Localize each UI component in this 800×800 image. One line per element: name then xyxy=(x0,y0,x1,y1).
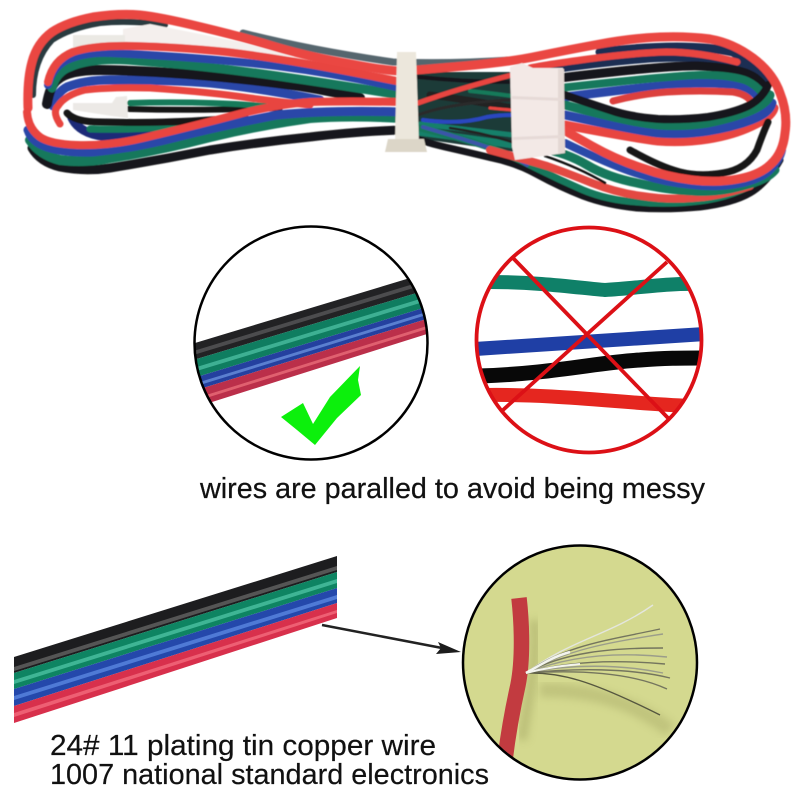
right middle ribbon xyxy=(565,85,774,142)
photo: full RGB cable bundle with connectors xyxy=(27,14,786,209)
caption: wire specification: 24# 11 plating tin copper wire xyxy=(50,730,436,762)
back inner wires, left loop xyxy=(67,102,280,137)
upper left connector xyxy=(73,24,295,57)
arrow to wire detail xyxy=(322,625,461,654)
panel: parallel wires, good xyxy=(190,226,430,460)
lower right ribbon xyxy=(400,122,782,209)
panel: tinned copper strand detail xyxy=(463,546,697,780)
circle outline xyxy=(194,226,428,460)
zip tie xyxy=(385,52,427,152)
panel: messy wires, bad xyxy=(475,228,705,452)
thin twisted centre wires xyxy=(415,72,515,152)
flat four-colour ribbon wire xyxy=(14,556,337,723)
right upper ribbon xyxy=(530,52,768,101)
red prohibition circle and cross xyxy=(476,228,702,452)
stripped red wire xyxy=(505,598,670,760)
lower left connector xyxy=(73,96,128,118)
loose wires xyxy=(475,282,705,406)
front left ribbon xyxy=(27,102,400,170)
tinned strands xyxy=(526,605,670,715)
right connector xyxy=(510,63,565,160)
parallel ribbon wire close-up xyxy=(196,279,426,402)
grey and dark backing strands of top loop xyxy=(33,22,763,95)
icon: green check mark xyxy=(281,366,361,445)
caption: wire specification: 1007 national standard electronics xyxy=(50,759,489,791)
second red strands of left stack xyxy=(48,46,500,124)
caption: wire specification xyxy=(50,730,489,791)
left inner ribbon stack xyxy=(47,53,400,106)
top outer red strand xyxy=(28,14,786,181)
caption: parallel wires: wires are paralled to avoid being messy xyxy=(199,473,705,505)
circle outline xyxy=(463,546,697,780)
